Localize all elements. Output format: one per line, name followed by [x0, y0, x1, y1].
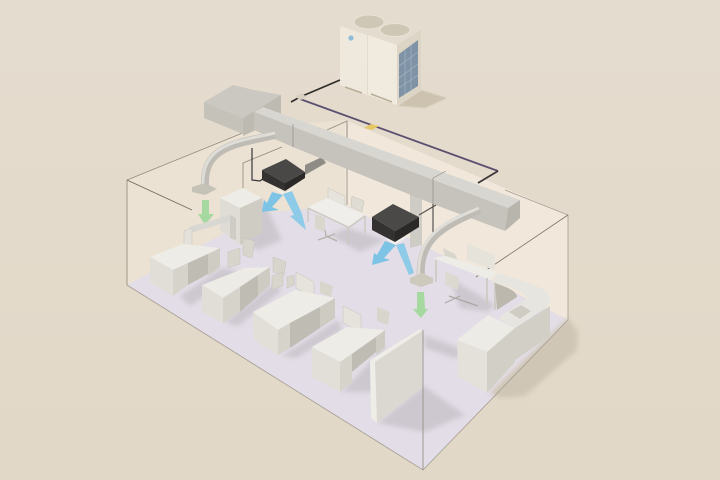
fan one [354, 15, 384, 29]
yellow valve [364, 124, 379, 130]
room outline lines [127, 121, 568, 470]
side panel [397, 30, 421, 105]
top [150, 244, 220, 270]
left face [150, 257, 173, 296]
reception floor shadow [490, 318, 578, 398]
partition wall [370, 329, 422, 423]
front block top [457, 315, 515, 352]
hanger line [432, 204, 434, 236]
desk three [253, 272, 335, 355]
left back wall [127, 120, 345, 285]
junction box [295, 93, 307, 100]
counter side [515, 306, 550, 360]
front panel right [368, 35, 397, 105]
curved counter top [492, 273, 551, 328]
front block left face [457, 340, 487, 393]
duct end [505, 200, 520, 231]
duct drop [230, 215, 236, 240]
blue airflow arrow right-down 1 [283, 191, 306, 230]
desk chair [315, 214, 337, 241]
duct front [254, 112, 508, 231]
duct over desk [190, 218, 230, 230]
supply plenum box [204, 85, 281, 136]
monitor [328, 188, 345, 208]
left diffuser [192, 183, 217, 195]
duct seam [293, 124, 446, 204]
reception counter [457, 273, 551, 393]
sink tray [509, 305, 531, 319]
plenum left face [204, 102, 243, 134]
floor [127, 205, 568, 470]
chair back [443, 248, 460, 265]
hanger bracket [419, 205, 436, 215]
green airflow arrow right [413, 292, 428, 318]
purple pipe [300, 99, 498, 171]
ground shadow [398, 90, 447, 108]
chair [320, 281, 333, 297]
desk one [150, 215, 236, 296]
right back wall [345, 120, 568, 320]
plenum right face [243, 95, 281, 136]
front panel left [340, 26, 367, 95]
logo badge [348, 35, 354, 41]
back desk [308, 188, 365, 245]
return pipe [478, 171, 498, 183]
blue airflow arrow left-down 1 [262, 192, 283, 212]
desk legs [308, 208, 365, 245]
green airflow arrow left [198, 200, 214, 225]
monitor [296, 272, 314, 298]
support pillar [410, 190, 422, 248]
near pedestal [173, 263, 188, 296]
room: walls and floor [127, 120, 568, 470]
desk four [312, 306, 390, 392]
left flexible duct [203, 133, 275, 185]
chair [445, 272, 478, 306]
right flexible duct [419, 208, 480, 277]
grey connector duct [305, 157, 326, 175]
knee recess [188, 254, 208, 285]
main duct [254, 107, 520, 231]
floor shadows [180, 198, 495, 432]
left cabinet [220, 188, 262, 245]
desk top [308, 198, 365, 227]
far pedestal [208, 248, 220, 276]
chair [377, 307, 390, 325]
duct top [254, 107, 520, 208]
drain pipe [252, 148, 265, 181]
base slats [345, 87, 392, 102]
desk two [202, 267, 270, 323]
chairs between desks [228, 238, 294, 290]
fan two [380, 24, 410, 36]
chair back [351, 196, 364, 212]
black pipe [291, 80, 340, 102]
refrigerant pipes [291, 80, 498, 183]
ceiling cassette unit right [372, 204, 419, 245]
front block right face [487, 328, 515, 393]
blue airflow arrow right-down 2 [396, 243, 414, 275]
monitor [184, 228, 192, 250]
monitor [467, 243, 495, 270]
coil grille [399, 40, 418, 98]
outdoor condenser unit [340, 15, 447, 108]
right diffuser [410, 273, 433, 287]
plenum top [204, 85, 281, 118]
legs [436, 260, 495, 310]
desk top [433, 256, 497, 280]
ceiling cassette unit left [262, 159, 305, 196]
monitor [343, 306, 361, 332]
blue airflow arrow left-down 2 [372, 241, 396, 265]
reception back desk [433, 243, 497, 310]
white underside [271, 184, 298, 196]
top [340, 17, 421, 44]
counter recess [495, 283, 517, 310]
